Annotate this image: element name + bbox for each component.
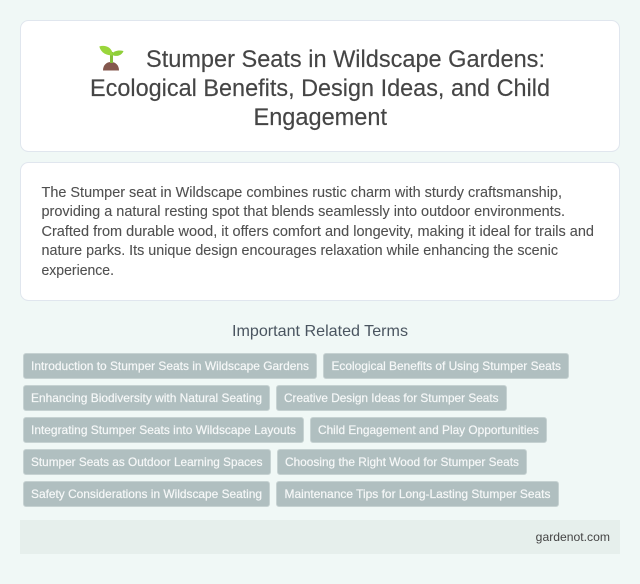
tag: Ecological Benefits of Using Stumper Seats bbox=[332, 359, 561, 373]
title text: Engagement bbox=[254, 104, 387, 131]
tag: Enhancing Biodiversity with Natural Seating bbox=[31, 391, 262, 405]
tag bbox=[276, 482, 558, 506]
tag bbox=[24, 482, 270, 506]
tag bbox=[324, 354, 568, 378]
tag: Safety Considerations in Wildscape Seating bbox=[31, 487, 262, 501]
description text: providing a natural resting spot that blends seamlessly into outdoor environments. bbox=[42, 204, 565, 220]
tag: Creative Design Ideas for Stumper Seats bbox=[284, 391, 498, 405]
footer bbox=[20, 520, 620, 554]
panel: title card bbox=[20, 20, 620, 152]
tag: Introduction to Stumper Seats in Wildscape Gardens bbox=[31, 359, 309, 373]
tag bbox=[24, 354, 316, 378]
tag bbox=[24, 386, 270, 410]
title text: Ecological Benefits, Design Ideas, and Child bbox=[90, 75, 550, 102]
tag bbox=[278, 450, 526, 474]
tag: Integrating Stumper Seats into Wildscape Layouts bbox=[31, 423, 296, 437]
title text: Stumper Seats in Wildscape Gardens: bbox=[146, 46, 545, 73]
icon: seedling bbox=[99, 46, 124, 70]
description text: nature parks. Its unique design encourages relaxation while enhancing the scenic bbox=[42, 243, 558, 259]
panel: description bbox=[20, 162, 620, 300]
tag: Maintenance Tips for Long-Lasting Stumper Seats bbox=[284, 487, 550, 501]
tag bbox=[24, 418, 304, 442]
tag: Child Engagement and Play Opportunities bbox=[318, 423, 539, 437]
heading: important related terms: Important Related Terms bbox=[232, 323, 408, 340]
footer source text: gardenot.com bbox=[536, 530, 610, 544]
tag bbox=[276, 386, 506, 410]
tag bbox=[310, 418, 546, 442]
title text bbox=[90, 46, 550, 131]
tag list bbox=[24, 354, 568, 506]
tag: Stumper Seats as Outdoor Learning Spaces bbox=[31, 455, 262, 469]
description text bbox=[42, 185, 594, 279]
description text: experience. bbox=[42, 263, 114, 279]
tag: Choosing the Right Wood for Stumper Seats bbox=[285, 455, 519, 469]
tag bbox=[24, 450, 270, 474]
description text: Crafted from durable wood, it offers comfort and longevity, making it ideal for trails and bbox=[42, 224, 594, 240]
description text: The Stumper seat in Wildscape combines rustic charm with sturdy craftsmanship, bbox=[42, 185, 562, 201]
